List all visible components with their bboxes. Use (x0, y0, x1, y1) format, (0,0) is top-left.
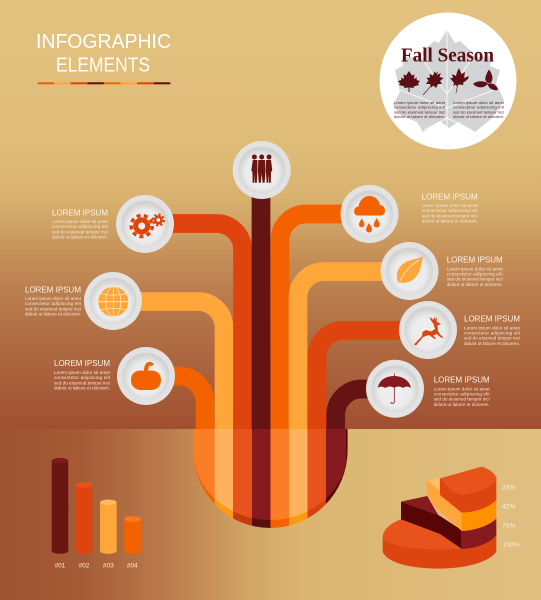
pie labels: 100% (502, 542, 520, 549)
text block: pumpkin: didunt ut labore et dolorem. (54, 385, 110, 390)
text block: globe: didunt ut labore et dolorem. (25, 312, 81, 317)
icon: leaf (397, 256, 423, 283)
text block: deer: LOREM IPSUM (464, 314, 520, 324)
badge text left: didunt ut labore et dolorem. (394, 114, 445, 119)
text block: globe: Lorem ipsum dolor sit amet (25, 296, 82, 301)
bar 04 (124, 516, 141, 554)
text block: deer: Lorem ipsum dolor sit amet (464, 325, 521, 330)
text block: pumpkin: sed do eiusmod tempor inci (54, 380, 110, 385)
icon: rain cloud (354, 196, 385, 232)
background sky (0, 0, 541, 430)
text block: umbrella: didunt ut labore et dolorem. (434, 402, 490, 407)
text block: gears: didunt ut labore et dolorem. (52, 235, 108, 240)
pie layer 100% (383, 519, 496, 569)
text block: rain: sed do eiusmod tempor inci (422, 213, 478, 218)
text block: umbrella (434, 375, 490, 407)
icon: pumpkin (131, 362, 161, 390)
text block: pumpkin: Lorem ipsum dolor sit amet (54, 370, 111, 375)
badge text right: consectetur adipiscing elit (453, 105, 505, 110)
bar 02 (76, 482, 92, 554)
text block: pumpkin: LOREM IPSUM (54, 358, 110, 368)
icon: globe (98, 287, 128, 317)
text block: deer (464, 314, 521, 346)
text block: deer: consectetur adipiscing elit (464, 330, 521, 336)
pie layer 42% (427, 478, 496, 531)
text block: leaf: Lorem ipsum dolor sit amet (447, 266, 503, 271)
title: ELEMENTS (56, 54, 150, 76)
bar labels (55, 562, 138, 570)
badge heading: Fall Season (401, 44, 494, 66)
badge text right (453, 100, 505, 119)
bar chart (52, 458, 141, 570)
text block: gears: sed do eiusmod tempor inci (52, 229, 108, 234)
text block: rain: consectetur adipiscing elit (422, 208, 478, 213)
icon: maple leaf 2 (450, 68, 469, 93)
pie layer 75% (401, 496, 496, 549)
icon: people (251, 154, 272, 183)
node: globe (84, 272, 142, 330)
text block: umbrella: consectetur adipiscing elit (434, 392, 490, 396)
icon: gears (131, 214, 164, 236)
pie labels: 23% (502, 484, 515, 492)
icon: oak leaf (423, 71, 444, 95)
text block: leaf (447, 255, 503, 287)
text block: leaf: sed do eiusmod tempor inci (447, 277, 503, 282)
badge text left (394, 100, 446, 119)
icon: umbrella (378, 374, 411, 403)
bar labels: #03 (103, 562, 114, 570)
background floor (0, 429, 541, 600)
pie layer 23% (440, 467, 496, 513)
bulb base of the tree (193, 429, 348, 529)
text block: rain (422, 192, 478, 224)
badge text left: sed do eiusmod tempor inci (394, 109, 445, 114)
title underline (38, 82, 170, 84)
icon: leaping deer (414, 316, 444, 346)
title (36, 31, 171, 76)
branching pipes (113, 170, 428, 430)
text block: globe (25, 284, 82, 317)
text block: deer: sed do eiusmod tempor inci (464, 336, 520, 341)
badge text left: Lorem ipsum dolor sit amet (394, 100, 446, 105)
pie labels (502, 484, 520, 549)
text block: rain: Lorem ipsum dolor sit amet (422, 203, 478, 208)
icon: three leaves (473, 70, 498, 90)
text block: umbrella: LOREM IPSUM (434, 375, 490, 385)
icon: maple leaf 1 (398, 71, 420, 92)
text block: globe: consectetur adipiscing elit (25, 301, 82, 306)
text block: gears: Lorem ipsum dolor sit amet (52, 219, 109, 224)
text block: gears: LOREM IPSUM (52, 208, 108, 218)
stacked 3D pie chart (383, 467, 496, 569)
bar 03 (100, 500, 117, 554)
text block: rain: didunt ut labore et dolorem. (422, 219, 478, 224)
bar labels: #01 (55, 562, 66, 570)
node: deer (399, 301, 457, 359)
backdrop maple leaf (393, 30, 504, 132)
bar labels: #04 (127, 562, 138, 570)
bar 01 (52, 458, 68, 554)
text block: umbrella: sed do eiusmod tempor inci (434, 397, 490, 402)
pie labels: 75% (502, 522, 515, 529)
text block: deer: didunt ut labore et dolorem. (464, 341, 520, 346)
node: umbrella (366, 360, 424, 418)
node: people (233, 141, 291, 199)
bar labels: #02 (79, 562, 90, 570)
badge text right: didunt ut labore et dolorem. (453, 114, 504, 119)
node: rain cloud (340, 185, 398, 243)
text block: rain: LOREM IPSUM (422, 192, 478, 202)
node: leaf (380, 242, 438, 300)
text block: leaf: consectetur adipiscing elit (447, 272, 503, 276)
text block: globe: sed do eiusmod tempor inci (25, 306, 81, 311)
panel: fall season badge (380, 12, 516, 150)
text block: leaf: LOREM IPSUM (447, 255, 503, 265)
node: gears (116, 195, 174, 253)
node: pumpkin (117, 347, 175, 405)
text block: umbrella: Lorem ipsum dolor sit amet (434, 386, 490, 391)
text block: pumpkin (54, 358, 111, 390)
text block: leaf: didunt ut labore et dolorem. (447, 282, 503, 287)
badge text right: sed do eiusmod tempor inci (453, 109, 504, 114)
text block: globe: LOREM IPSUM (25, 284, 81, 294)
pie labels: 42% (502, 504, 515, 511)
text block: gears (52, 208, 109, 240)
badge text left: consectetur adipiscing elit (394, 105, 446, 110)
text block: gears: consectetur adipiscing elit (52, 224, 109, 229)
title: INFOGRAPHIC (36, 31, 171, 53)
badge text right: Lorem ipsum dolor sit amet (453, 100, 505, 105)
text block: pumpkin: consectetur adipiscing elit (54, 375, 111, 380)
